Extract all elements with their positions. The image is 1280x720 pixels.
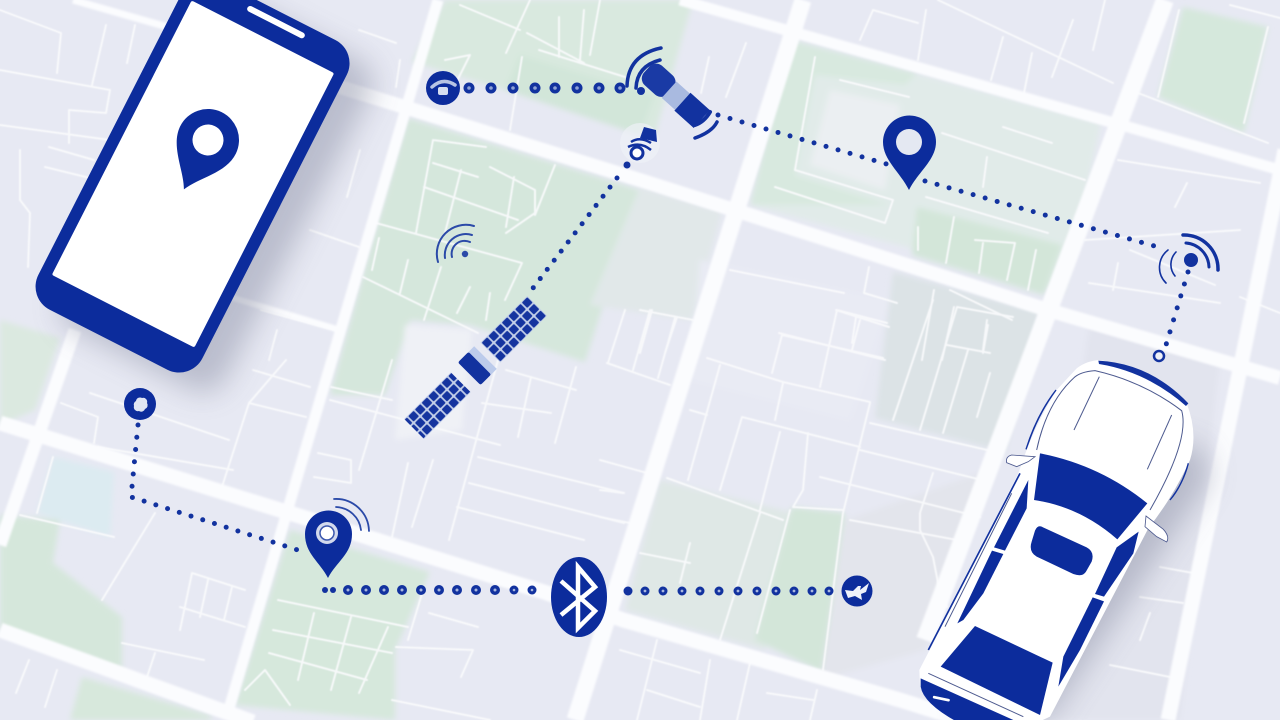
icon: wifi signal in green block [437, 225, 474, 262]
front windshield [941, 626, 1053, 715]
icon: radio tower with signal arcs [1159, 235, 1218, 283]
satellite body [638, 60, 710, 129]
icon: ring near car [1154, 351, 1164, 361]
icon: bluetooth [551, 557, 607, 637]
solar panel lower [404, 372, 471, 439]
rear window [1034, 453, 1147, 539]
dotted route: phone circle to satellite dish [464, 82, 645, 95]
top satellite with signal arcs [620, 48, 717, 168]
left windows [994, 480, 1028, 551]
dotted route: clover circle to bottom pin [131, 425, 304, 552]
car [919, 360, 1193, 720]
phone body [27, 0, 359, 381]
dotted route: top satellite down to lower satellite [530, 178, 617, 292]
dotted route: top satellite to pin and tower [718, 115, 1188, 345]
icon: map pin with route [883, 116, 936, 190]
car left arc [1026, 390, 1056, 449]
phone screen [52, 0, 334, 348]
signal arcs [627, 48, 717, 138]
solar panel upper [481, 296, 547, 362]
icon: pin on phone [156, 99, 249, 203]
phone [27, 0, 359, 381]
small dish [620, 123, 660, 168]
right mirror [1145, 516, 1168, 542]
right windows [1095, 532, 1139, 597]
phone speaker [246, 5, 306, 39]
car body [919, 360, 1193, 720]
car roof arc [1098, 361, 1188, 406]
icon: phone circle [426, 71, 460, 105]
icon: bottom pin with wifi arcs [305, 499, 369, 578]
car hood lines [928, 371, 1183, 717]
satellite body [468, 346, 497, 375]
bumper [921, 678, 1013, 720]
dotted route: bottom pin to bluetooth [322, 585, 536, 595]
left mirror [1006, 455, 1035, 467]
lower satellite [403, 295, 548, 440]
car right shoulder [1170, 463, 1188, 500]
dotted route: bluetooth to plane [624, 586, 834, 596]
icon: clover circle [124, 388, 156, 420]
icon: plane circle [842, 576, 872, 606]
sunroof [1031, 526, 1093, 575]
headlight [933, 696, 950, 702]
